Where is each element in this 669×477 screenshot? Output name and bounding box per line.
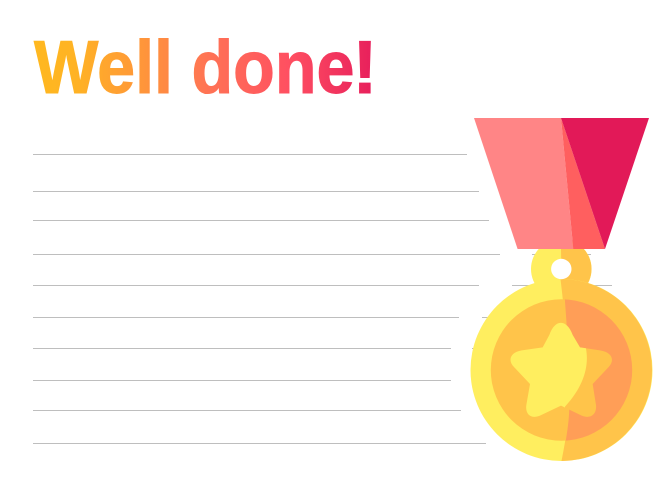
medal inner circle — [491, 295, 640, 445]
title — [34, 25, 377, 109]
writing lines — [33, 154, 612, 444]
ribbon — [474, 118, 649, 249]
title: done — [192, 25, 354, 109]
medal loop — [531, 239, 592, 299]
icon: medal — [470, 118, 652, 461]
icon: star — [510, 322, 612, 417]
medal disc — [470, 279, 652, 461]
title: Well — [34, 25, 173, 109]
medal hole — [551, 259, 572, 279]
title: ! — [353, 25, 377, 109]
